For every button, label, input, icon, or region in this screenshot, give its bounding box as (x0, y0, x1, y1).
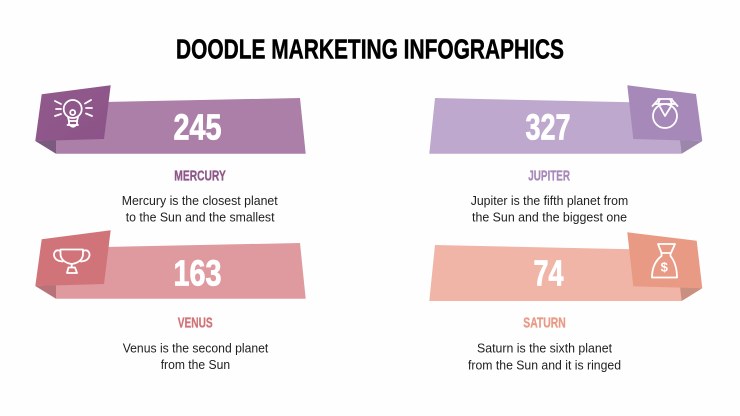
fold: venus (35, 285, 56, 299)
banner: saturn (429, 245, 682, 301)
tab: saturn (627, 232, 702, 288)
icon: money bag (652, 244, 677, 278)
panel: jupiter (429, 85, 702, 225)
description: mercury: to the Sun and the smallest (126, 210, 275, 225)
panel: saturn (429, 232, 702, 372)
banner: jupiter (429, 98, 682, 154)
value: 163: 163 (174, 252, 222, 294)
panel: mercury (35, 85, 306, 225)
icon: stopwatch (652, 99, 678, 128)
title: DOODLE MARKETING INFOGRAPHICS (176, 34, 564, 64)
description: jupiter: the Sun and the biggest one (472, 210, 627, 225)
fold: mercury (35, 140, 56, 154)
label: saturn: SATURN (523, 315, 566, 331)
description: venus: from the Sun (161, 357, 230, 372)
icon: dollar sign: $ (661, 260, 669, 274)
tab: jupiter (627, 85, 702, 141)
icon: light bulb (55, 100, 92, 127)
value: 327: 327 (526, 106, 570, 148)
label: venus: VENUS (178, 315, 213, 331)
banner: venus (56, 243, 306, 299)
value: 74: 74 (534, 252, 564, 294)
panel: venus (35, 230, 306, 372)
tab: mercury (35, 85, 111, 141)
description: saturn: Saturn is the sixth planet (477, 341, 612, 356)
label: mercury: MERCURY (174, 169, 226, 185)
description: saturn: from the Sun and it is ringed (468, 357, 621, 372)
icon: trophy (54, 250, 89, 273)
fold: saturn (680, 287, 702, 301)
banner: mercury (56, 98, 306, 154)
description: jupiter: Jupiter is the fifth planet from (471, 193, 628, 208)
value: 245: 245 (174, 106, 222, 148)
description: venus: Venus is the second planet (123, 340, 269, 355)
fold: jupiter (680, 140, 702, 154)
tab: venus (35, 230, 111, 286)
description: mercury: Mercury is the closest planet (122, 193, 278, 208)
label: jupiter: JUPITER (528, 169, 570, 185)
